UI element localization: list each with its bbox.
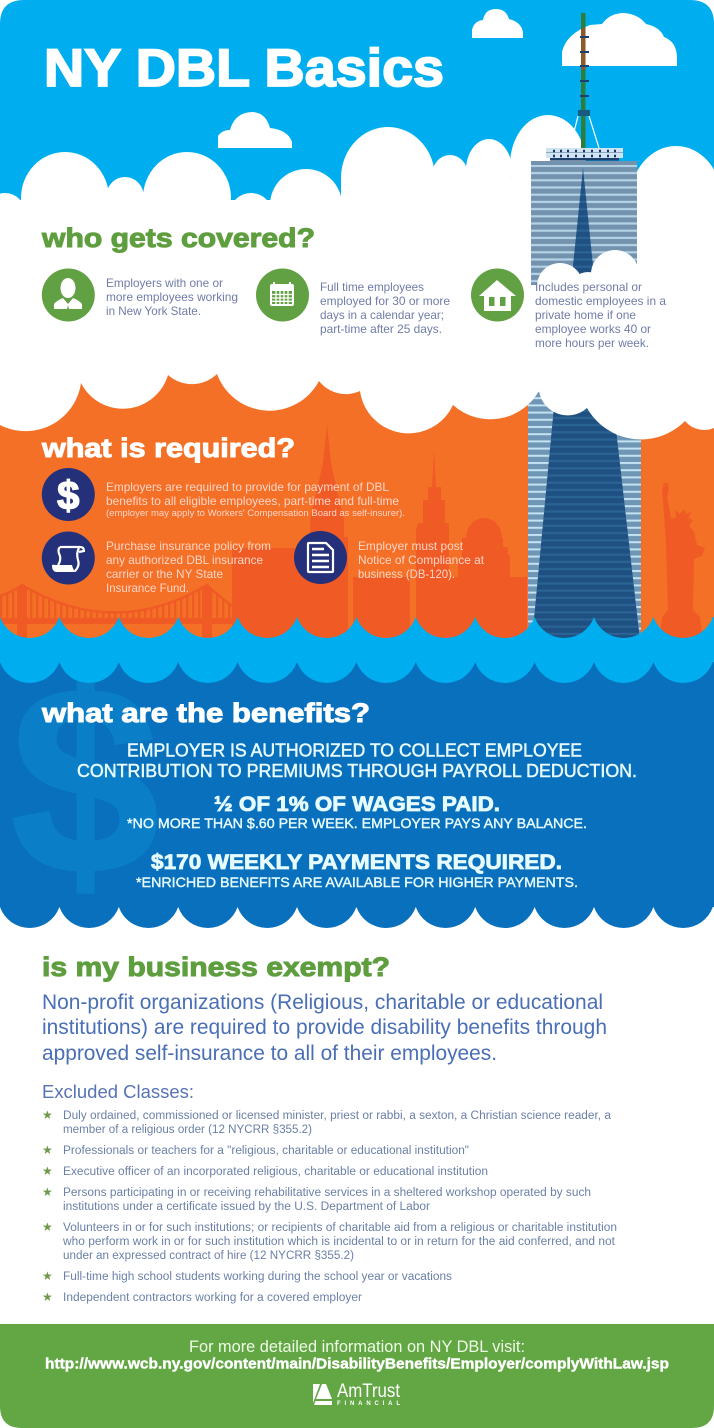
domed building: [458, 518, 527, 640]
heading: who gets covered: who gets covered?: [41, 223, 315, 253]
text: wages paid: *NO MORE THAN $.60 PER WEEK. EMPLOYER PAYS ANY BALANCE.: [127, 815, 587, 831]
list item: volunteers: [42, 1220, 617, 1262]
text: employers: in New York State.: [106, 304, 201, 318]
text: purchase policy: [106, 539, 271, 595]
text: notice of compliance: Notice of Compliance at: [358, 553, 485, 567]
freedom tower upper section: [531, 13, 637, 285]
list item: executive: Executive officer of an incorporated religious, charitable or educational institution: [63, 1166, 488, 1178]
list item: students: Full-time high school students working during the school year or vacations: [63, 1271, 452, 1283]
sky background: [0, 0, 714, 320]
tower body: [531, 161, 637, 165]
text: payroll deduction: [77, 740, 637, 781]
list item: professionals: Professionals or teachers for a "religious, charitable or educational institution": [63, 1145, 469, 1157]
freedom tower lower section: [528, 385, 641, 641]
icon: dollar: [42, 468, 95, 521]
text: payroll deduction: CONTRIBUTION TO PREMIUMS THROUGH PAYROLL DEDUCTION.: [77, 761, 637, 781]
list item: contractors: ★: [42, 1290, 53, 1304]
text: wages paid: ½ OF 1% OF WAGES PAID.: [214, 793, 500, 816]
cloud small top: [472, 9, 523, 38]
footer panel: [0, 1324, 714, 1428]
icon: document: [294, 531, 347, 584]
chrysler style tower: [232, 425, 348, 640]
text: weekly payments: [136, 851, 578, 890]
white cloud bank: [0, 115, 714, 439]
text: notice of compliance: business (DB-120).: [358, 567, 455, 581]
list item: ordained: [42, 1108, 612, 1136]
dark blue panel with scalloped edges: [0, 662, 714, 928]
list item: ordained: member of a religious order (12 NYCRR §355.2): [63, 1124, 312, 1136]
text: weekly payments: $170 WEEKLY PAYMENTS REQUIRED.: [151, 851, 562, 874]
icon: house: [471, 268, 524, 322]
list item: professionals: ★: [42, 1143, 53, 1157]
text: employers: [106, 276, 238, 318]
text: full time: days in a calendar year;: [320, 308, 444, 322]
amtrust logo: FINANCIAL: [337, 1401, 400, 1407]
text: notice of compliance: [358, 539, 485, 581]
text: domestic employees: [535, 280, 666, 350]
list item: students: ★: [42, 1269, 53, 1283]
text: domestic employees: domestic employees in a: [535, 294, 666, 308]
text: employers: Employers with one or: [106, 276, 223, 290]
subheading: excluded classes: Excluded Classes:: [42, 1082, 194, 1102]
text: wages paid: [127, 793, 587, 831]
text: purchase policy: Purchase insurance policy from: [106, 539, 271, 553]
footer text: For more detailed information on NY DBL visit:: [189, 1338, 525, 1356]
paragraph: non-profit organizations: Non-profit organizations (Religious, charitable or educational: [42, 990, 603, 1014]
text: full time: employed for 30 or more: [320, 294, 450, 308]
list item: ordained: ★: [42, 1108, 53, 1122]
list item: ordained: Duly ordained, commissioned or licensed minister, priest or rabbi, a sexton, a Christian science reader, a: [63, 1110, 612, 1122]
amtrust logo: [313, 1381, 401, 1407]
icon: person: [42, 268, 95, 322]
list item: volunteers: under an expressed contract of hire (12 NYCRR §355.2): [63, 1250, 354, 1262]
roof deck: [546, 148, 623, 161]
list item: executive: ★: [42, 1164, 53, 1178]
empire state building: [416, 450, 462, 640]
paragraph: non-profit organizations: [42, 990, 607, 1065]
text: payment of DBL: benefits to all eligible employees, part-time and full-time: [106, 494, 399, 508]
list item: rehabilitative: institutions under a certificate issued by the U.S. Department of Labor: [63, 1201, 430, 1213]
list item: volunteers: who perform work in or for such institution which is incidental to or in return for the aid conferred, and not: [62, 1236, 616, 1248]
amtrust logo: AmTrust: [337, 1381, 401, 1402]
text: full time: part-time after 25 days.: [320, 322, 442, 336]
list item: volunteers: ★: [42, 1220, 53, 1234]
text: payment of DBL: (employer may apply to Workers' Compensation Board as self-insurer).: [106, 508, 405, 518]
text: purchase policy: any authorized DBL insurance: [106, 553, 263, 567]
list item: rehabilitative: ★: [42, 1185, 53, 1199]
icon: dollar: $: [57, 474, 79, 518]
orange band: [0, 340, 714, 650]
icon: calendar: [256, 268, 309, 322]
cloud large right: [562, 13, 677, 66]
mid block: [353, 577, 410, 640]
text: domestic employees: employee works 40 or: [535, 322, 651, 336]
cloud small center: [218, 112, 292, 148]
text: domestic employees: more hours per week.: [535, 336, 649, 350]
paragraph: non-profit organizations: approved self-insurance to all of their employees.: [42, 1041, 497, 1065]
title: NY DBL Basics: [44, 39, 444, 98]
list item: rehabilitative: Persons participating in or receiving rehabilitative services in a sheltered workshop operated by such: [63, 1187, 591, 1199]
light blue bumps over dollar: [59, 640, 119, 683]
text: full time: Full time employees: [320, 280, 424, 294]
text: purchase policy: Insurance Fund.: [106, 581, 189, 595]
heading: is my business exempt: is my business exempt?: [42, 952, 390, 982]
text: notice of compliance: Employer must post: [358, 539, 464, 553]
paragraph: non-profit organizations: institutions) are required to provide disability benefits through: [42, 1015, 607, 1039]
text: full time: [320, 280, 450, 336]
text: domestic employees: Includes personal or: [535, 280, 642, 294]
footer url: http://www.wcb.ny.gov/content/main/DisabilityBenefits/Employer/complyWithLaw.jsp: [45, 1356, 669, 1372]
excluded classes list: [42, 1108, 617, 1304]
antenna: [570, 13, 599, 148]
heading: what are the benefits: what are the benefits?: [41, 698, 370, 728]
heading: what is required: what is required?: [41, 433, 295, 463]
icon: scroll: [42, 532, 95, 584]
light blue wave: [0, 617, 714, 700]
list item: volunteers: Volunteers in or for such institutions; or recipients of charitable aid from a religious or charitable institution: [63, 1222, 617, 1234]
text: payroll deduction: EMPLOYER IS AUTHORIZED TO COLLECT EMPLOYEE: [127, 740, 582, 760]
list item: rehabilitative: [42, 1185, 591, 1213]
list item: contractors: Independent contractors working for a covered employer: [63, 1292, 362, 1304]
golden gate bridge: [0, 583, 232, 640]
text: payment of DBL: [106, 480, 405, 518]
text: employers: more employees working: [106, 290, 238, 304]
skyline silhouette: [0, 425, 705, 640]
text: domestic employees: private home if one: [535, 308, 636, 322]
watermark dollar sign: $: [11, 633, 159, 929]
text: weekly payments: *ENRICHED BENEFITS ARE AVAILABLE FOR HIGHER PAYMENTS.: [136, 874, 578, 890]
statue of liberty: [660, 483, 705, 640]
text: payment of DBL: Employers are required to provide for payment of DBL: [106, 480, 389, 494]
text: purchase policy: carrier or the NY State: [106, 567, 223, 581]
cloud covering tower: [527, 250, 643, 390]
